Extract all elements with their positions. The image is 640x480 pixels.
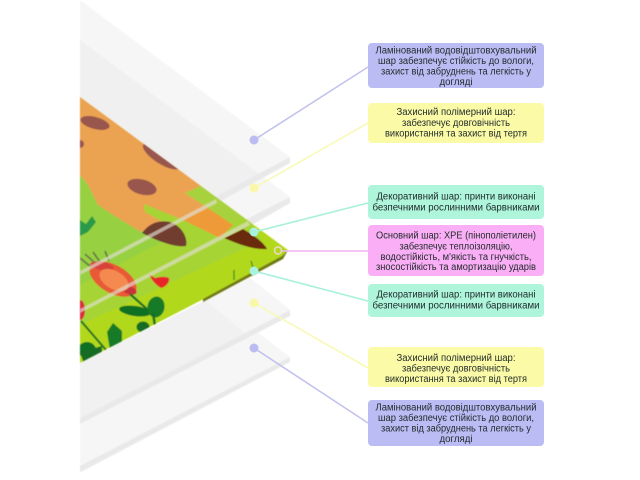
- callout: top laminated layer: Ламінований водовідштовхувальний: [376, 46, 536, 56]
- callout: top decorative layer: Декоративний шар: принти виконані: [376, 192, 536, 202]
- left flower and leaves: [75, 216, 122, 364]
- callout: bottom decorative layer: [368, 284, 544, 317]
- callout: top laminated layer: [368, 43, 544, 88]
- callout: bottom laminated layer: шар забезпечує стійкість до вологи,: [378, 412, 534, 424]
- connector lines and dots: [250, 67, 368, 423]
- callout: core layer: зносостійкість та амортизацію ударів: [376, 262, 536, 273]
- callout: bottom laminated layer: захист від забруднень та легкість у: [381, 422, 531, 434]
- callout: bottom protective layer: Захисний полімерний шар:: [396, 353, 516, 364]
- callout: core layer: Основний шар: ХРЕ (пінополіетилен): [376, 230, 536, 242]
- sheet: bottom laminated layer: [80, 305, 290, 473]
- callout: bottom protective layer: забезпечує довговічність: [402, 362, 510, 374]
- orange giraffe band: [183, 208, 233, 238]
- callout: top decorative layer: [368, 185, 544, 219]
- mat base green: [80, 97, 288, 363]
- sheet: top laminated layer: [80, 0, 290, 276]
- callout: top laminated layer: догляді: [440, 77, 472, 88]
- heart: [149, 274, 169, 288]
- brown spots: [76, 113, 267, 249]
- connector: top protective: [250, 123, 368, 192]
- connector: bottom decorative: [250, 266, 368, 301]
- callout: top decorative layer: безпечними рослинними барвниками: [372, 202, 540, 214]
- callout: bottom laminated layer: [368, 400, 544, 446]
- stripe: top protective edge: [80, 221, 250, 313]
- callout: top protective layer: забезпечує довговічність: [402, 117, 510, 129]
- callout: bottom laminated layer: догляді: [440, 434, 472, 445]
- sheet corner lighter area: [217, 176, 290, 225]
- sheet: top protective layer: [80, 40, 290, 314]
- sheet edge: top protective layer: [245, 197, 290, 226]
- green patch: [186, 186, 236, 213]
- connector: core: [274, 247, 368, 254]
- stripe: top laminated edge: [80, 199, 217, 275]
- callout: top laminated layer: шар забезпечує стійкість до вологи,: [378, 55, 534, 67]
- orange giraffe body: [80, 97, 208, 232]
- connector: bottom protective: [250, 298, 368, 368]
- lower film sheets: [80, 278, 290, 473]
- sheet edge: top laminated layer: [213, 157, 290, 203]
- translucent film edges over mat: [80, 199, 250, 313]
- upper film sheets: [80, 0, 290, 314]
- callout: top protective layer: Захисний полімерний шар:: [396, 107, 516, 118]
- callout: core layer: водостійкість, м'якість та гнучкість,: [380, 252, 532, 263]
- callout: top laminated layer: захист від забруднень та легкість у: [381, 66, 531, 78]
- flower: [80, 251, 166, 332]
- connector: top laminated: [250, 67, 368, 144]
- callout: bottom protective layer: використання та захист від тертя: [385, 374, 527, 385]
- callout: bottom decorative layer: Декоративний шар: принти виконані: [376, 290, 536, 300]
- callout: top protective layer: [368, 103, 544, 143]
- layered mat infographic: [79, 2, 544, 472]
- printed mat core: [75, 97, 288, 364]
- callout: bottom laminated layer: Ламінований водовідштовхувальний: [376, 402, 536, 414]
- callout: bottom protective layer: [368, 347, 544, 387]
- mat side edge: [203, 250, 288, 302]
- callout: core layer: забезпечує теплоізоляцію,: [400, 240, 512, 252]
- mat edge notch: [234, 261, 253, 280]
- connector: top decorative: [250, 203, 368, 236]
- callout: core layer: [368, 225, 544, 276]
- callout: top protective layer: використання та захист від тертя: [385, 128, 527, 140]
- connector: bottom laminated: [250, 344, 368, 423]
- callout: bottom decorative layer: безпечними рослинними барвниками: [372, 300, 540, 312]
- light green background: [80, 202, 262, 325]
- sheet: bottom protective layer: [80, 278, 290, 424]
